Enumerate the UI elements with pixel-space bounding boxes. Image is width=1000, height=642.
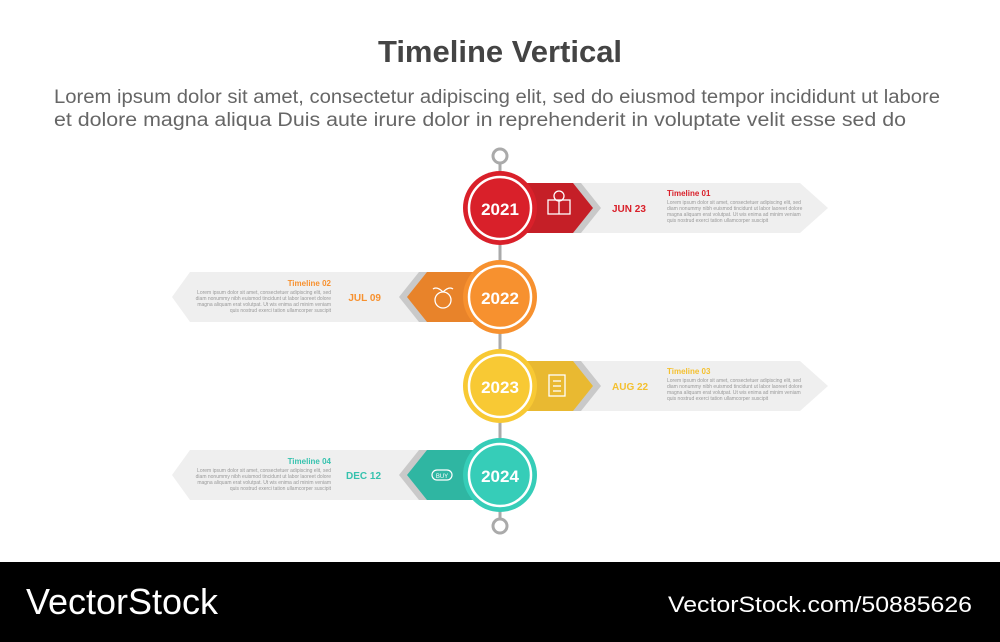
item 2023 (463, 349, 828, 423)
item 2021: Timeline 01 (667, 189, 711, 198)
vertical line (493, 149, 507, 533)
item 2024: BUY (436, 474, 448, 480)
item 2023: Lorem ipsum dolor sit amet, consectetuer adipiscing elit, sed (667, 378, 801, 384)
footer bar (0, 562, 1000, 642)
item 2023: 2023 (481, 378, 519, 397)
item 2021: Lorem ipsum dolor sit amet, consectetuer adipiscing elit, sed (667, 200, 801, 206)
item 2022 (172, 260, 537, 334)
title: Timeline Vertical (378, 34, 622, 69)
item 2022: quis nostrud exerci tation ullamcorper suscipit (230, 308, 332, 314)
item 2021: JUN 23 (612, 204, 646, 215)
item 2021 (463, 171, 828, 245)
item 2023: magna aliquam erat volutpat. Ut wis enima ad minim veniam (667, 390, 801, 396)
item 2021: magna aliquam erat volutpat. Ut wis enima ad minim veniam (667, 212, 801, 218)
item 2022: diam nonummy nibh euismod tincidunt ut labor laoreet dolore (196, 296, 331, 302)
item 2022: magna aliquam erat volutpat. Ut wis enima ad minim veniam (197, 302, 331, 308)
item 2022: JUL 09 (348, 293, 381, 304)
item 2024: 2024 (481, 467, 519, 486)
item 2023: AUG 22 (612, 382, 649, 393)
item 2022: Lorem ipsum dolor sit amet, consectetuer adipiscing elit, sed (197, 290, 331, 296)
item 2023: diam nonummy nibh euismod tincidunt ut labor laoreet dolore (667, 384, 803, 390)
item 2023: quis nostrud exerci tation ullamcorper suscipit (667, 396, 769, 402)
subtitle: Lorem ipsum dolor sit amet, consectetur adipiscing elit, sed do eiusmod tempor incididunt ut labore (54, 87, 940, 108)
footer bar: VectorStock (26, 581, 219, 622)
item 2021: quis nostrud exerci tation ullamcorper suscipit (667, 218, 769, 224)
item 2024: DEC 12 (346, 471, 381, 482)
item 2024: Timeline 04 (288, 457, 332, 466)
item 2023: Timeline 03 (667, 367, 711, 376)
item 2021: diam nonummy nibh euismod tincidunt ut labor laoreet dolore (667, 206, 803, 212)
item 2024: magna aliquam erat volutpat. Ut wis enima ad minim veniam (197, 480, 331, 486)
footer bar: VectorStock.com/50885626 (668, 592, 972, 617)
item 2024: Lorem ipsum dolor sit amet, consectetuer adipiscing elit, sed (197, 468, 331, 474)
item 2024: quis nostrud exerci tation ullamcorper suscipit (230, 486, 332, 492)
item 2022: Timeline 02 (288, 279, 332, 288)
item 2024: diam nonummy nibh euismod tincidunt ut labor laoreet dolore (196, 474, 331, 480)
subtitle: et dolore magna aliqua Duis aute irure dolor in reprehenderit in voluptate velit esse sed do (54, 110, 906, 131)
subtitle (54, 87, 940, 131)
item 2022: 2022 (481, 289, 519, 308)
item 2024 (172, 438, 537, 512)
item 2021: 2021 (481, 200, 519, 219)
